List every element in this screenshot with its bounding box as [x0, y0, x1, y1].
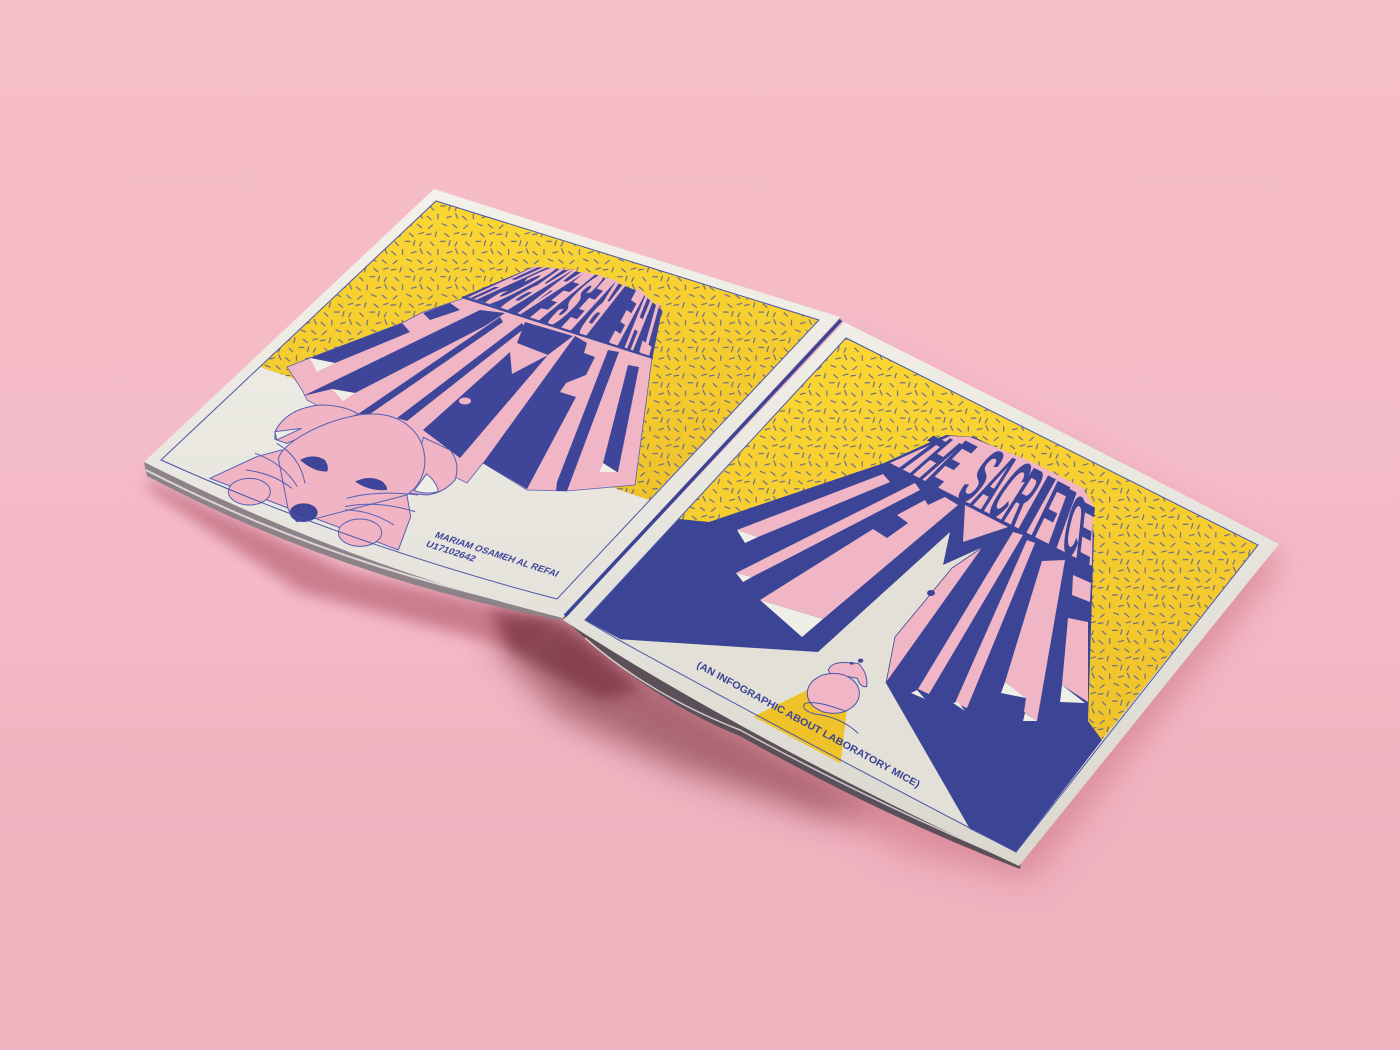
- left page stack: [144, 462, 562, 620]
- top title row: THE SACRIFICE: F: [1021, 462, 1080, 561]
- right ear: [410, 437, 457, 495]
- white extrusion tips: [736, 530, 1085, 721]
- top title row: THE RESEARCH: [447, 257, 666, 371]
- blue gaps between letters: [303, 303, 639, 491]
- top title row: THE SACRIFICE: E: [910, 428, 991, 502]
- yellow field: [679, 338, 1258, 740]
- yellow field: [260, 201, 819, 500]
- panel: back cover (left page): [144, 189, 840, 618]
- left page paper: [144, 189, 840, 618]
- yellow spotlight: [753, 689, 847, 763]
- top title row: THE SACRIFICE: R: [988, 452, 1057, 545]
- word as live text: DEMAND: [422, 329, 603, 425]
- top title row: THE SACRIFICE: I: [1038, 469, 1087, 569]
- top title row: THE SACRIFICE: H: [895, 428, 975, 492]
- subtitle: (AN INFOGRAPHIC ABOUT LABORATORY MICE): [695, 660, 921, 791]
- dot: [459, 398, 471, 404]
- top title row: THE RESEARCH: E: [601, 274, 653, 362]
- title graphic: OF MICE: [585, 435, 1102, 852]
- right page stack: [563, 610, 1022, 869]
- big title row: DEMAND: [287, 297, 653, 491]
- mouse parts: [804, 663, 867, 733]
- top title row: THE RESEARCH: A: [498, 258, 601, 326]
- top title row: THE RESEARCH: C: [462, 258, 579, 314]
- top title row: THE RESEARCH: E: [549, 264, 629, 343]
- white extrusion tips: [310, 358, 617, 472]
- body: [807, 673, 859, 713]
- top title row: THE SACRIFICE: A: [956, 440, 1033, 528]
- head: [278, 414, 425, 522]
- left ear: [275, 405, 358, 443]
- top title row: THE RESEARCH: S: [531, 262, 620, 338]
- top title row: THE SACRIFICE: S: [942, 433, 1021, 519]
- page frame line: [585, 338, 1258, 852]
- tail: [804, 703, 858, 733]
- whiskers: [246, 443, 418, 525]
- shadow under booklet: [146, 340, 1285, 880]
- top title row: THE RESEARCH: R: [478, 258, 591, 321]
- eyes and nose: [290, 456, 387, 522]
- top title row: THE SACRIFICE: T: [880, 427, 960, 482]
- head and ears: [828, 663, 867, 687]
- confetti dashes: [260, 201, 819, 500]
- blue mass: [585, 435, 1102, 852]
- small mouse with spotlight: [753, 659, 867, 763]
- page frame line: [161, 201, 819, 599]
- confetti dashes: [679, 338, 1258, 740]
- top title row: THE SACRIFICE: C: [972, 445, 1047, 537]
- panel: front cover (right page): [563, 322, 1279, 866]
- row divider: [462, 297, 653, 358]
- top title row: THE RESEARCH: E: [515, 260, 611, 332]
- top title row: THE SACRIFICE: C: [1055, 477, 1092, 578]
- word as live text: OF MICE: [696, 513, 815, 586]
- pink letter mass: [287, 297, 652, 491]
- author name: MARIAM OSAMEH AL REFAI: [432, 530, 561, 579]
- white path: [616, 532, 983, 829]
- lying mouse illustration: [210, 405, 457, 550]
- right paw: [338, 519, 382, 546]
- top title row: THE RESEARCH: R: [565, 267, 638, 350]
- student id: U17102642: [423, 539, 478, 564]
- top title row: THE SACRIFICE: E: [1073, 483, 1098, 586]
- mouse body: [210, 450, 411, 550]
- top title row: THE RESEARCH: H: [619, 281, 660, 366]
- left paw: [228, 478, 270, 505]
- mouse nose: [858, 659, 863, 663]
- top title row: THE SACRIFICE: I: [1004, 457, 1069, 553]
- top title row: THE SACRIFICE: [880, 427, 1098, 586]
- right page paper: [563, 322, 1279, 866]
- top title row: THE RESEARCH: T: [636, 286, 666, 371]
- big dot: [927, 590, 935, 596]
- top title row: THE RESEARCH: H: [447, 257, 568, 308]
- pink gaps: [736, 474, 1091, 721]
- spine: [565, 320, 841, 616]
